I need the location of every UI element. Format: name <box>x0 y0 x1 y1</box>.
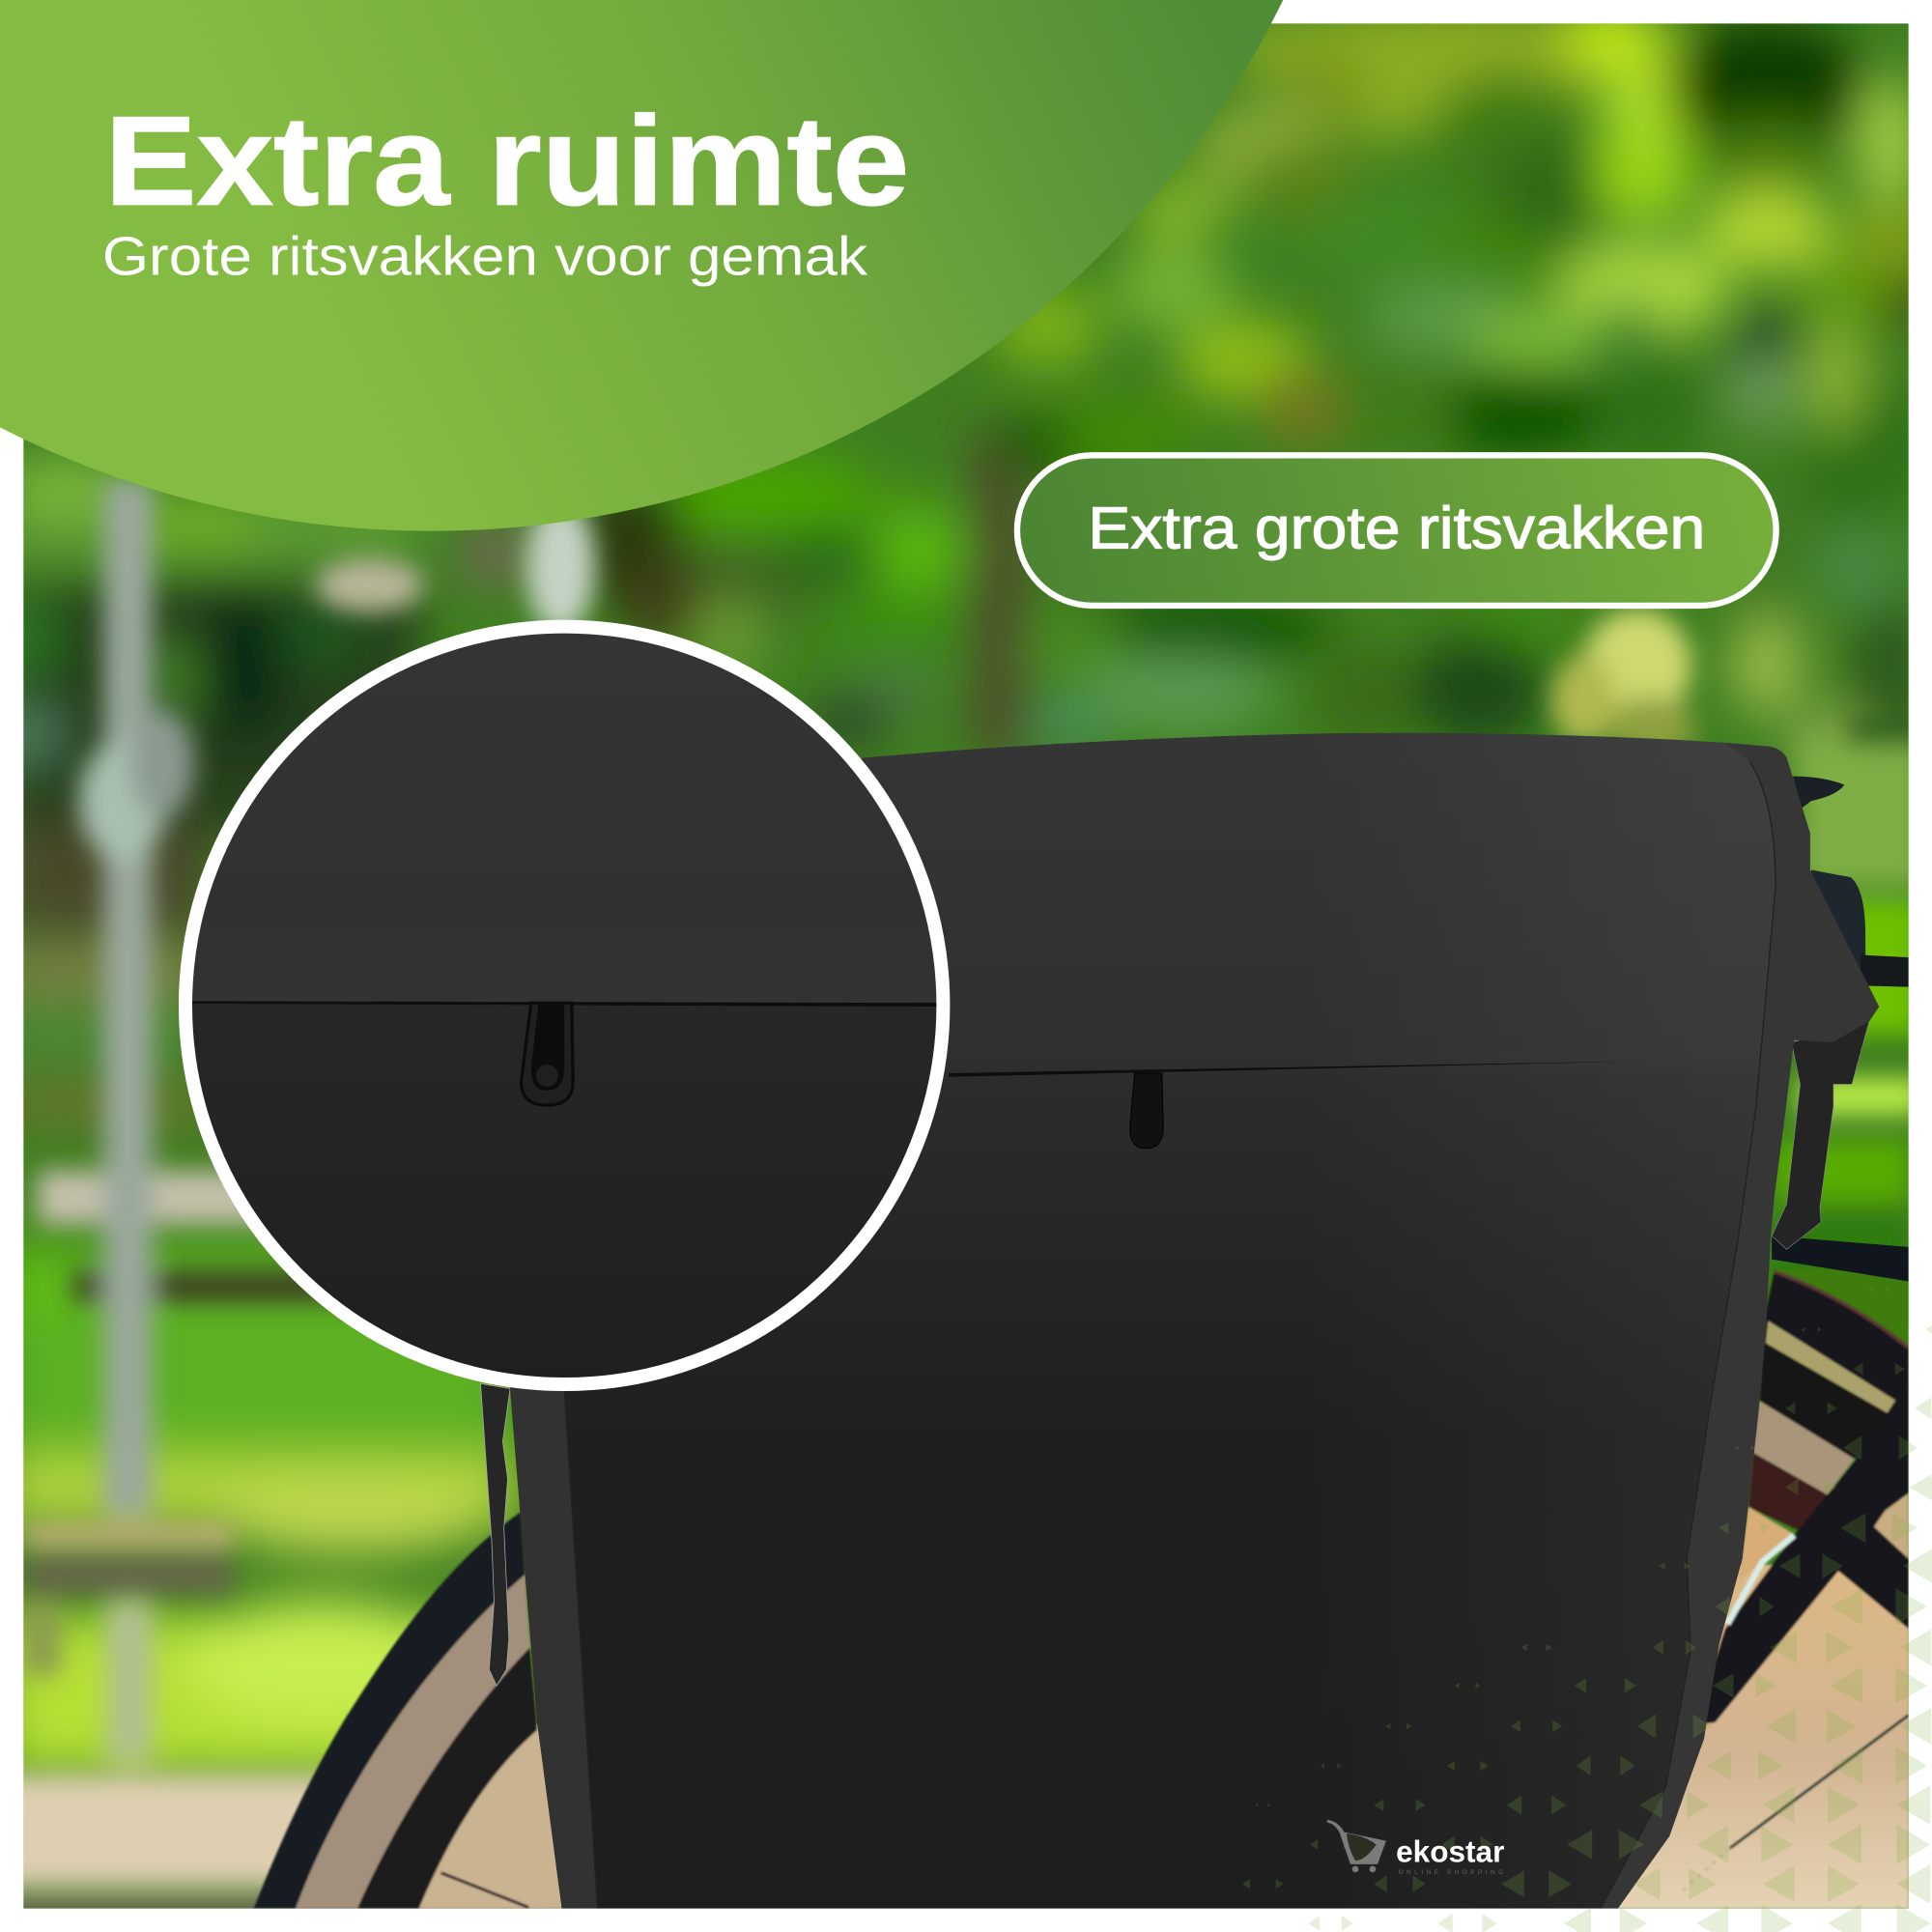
left bicycle wheel <box>254 1512 567 1909</box>
bench and posts <box>37 1171 382 1225</box>
bag right-side sheen <box>1293 733 1786 1910</box>
tree trunk <box>974 425 1025 757</box>
left forest <box>0 487 419 567</box>
lower pocket <box>185 1003 949 1385</box>
logo tagline: ONLINE SHOPPING <box>1399 1869 1503 1876</box>
green corner shape <box>0 0 1380 531</box>
title: Extra ruimte <box>104 90 909 232</box>
triangle pattern <box>1242 1288 1932 1932</box>
callout pill <box>1017 455 1776 606</box>
zipper pull enlarged <box>522 1003 573 1105</box>
magnified circle <box>185 627 949 1385</box>
right of bag greens <box>1799 739 1922 887</box>
icon: shopping cart with leaf <box>1327 1820 1386 1872</box>
bright posts <box>526 499 595 635</box>
bush <box>1583 609 1691 722</box>
zipper pull <box>1130 1073 1163 1149</box>
pannier bag <box>510 733 1879 1910</box>
middle <box>645 455 880 543</box>
lower left lawn <box>0 1244 518 1503</box>
callout label: Extra grote ritsvakken <box>1088 496 1705 561</box>
ground left <box>0 1775 567 1888</box>
strap right of bag <box>1772 1021 1869 1249</box>
zipper line <box>185 1001 949 1007</box>
top right foliage <box>1220 5 1688 94</box>
flap opening line <box>949 1061 1658 1077</box>
logo: ekostar <box>1327 1820 1504 1876</box>
upper flap <box>185 629 949 1003</box>
below callout <box>1054 596 1337 661</box>
side panel right <box>1601 743 1879 1909</box>
subtitle: Grote ritsvakken voor gemak <box>102 225 868 286</box>
seams <box>1601 761 1776 1909</box>
side panel left <box>510 1389 598 1909</box>
logo wordmark: ekostar <box>1396 1833 1504 1868</box>
strap left of bag <box>480 1383 510 1686</box>
right bicycle wheel and frame <box>1602 1269 1909 1909</box>
bicycle handlebar and mirror <box>1772 777 1909 1282</box>
